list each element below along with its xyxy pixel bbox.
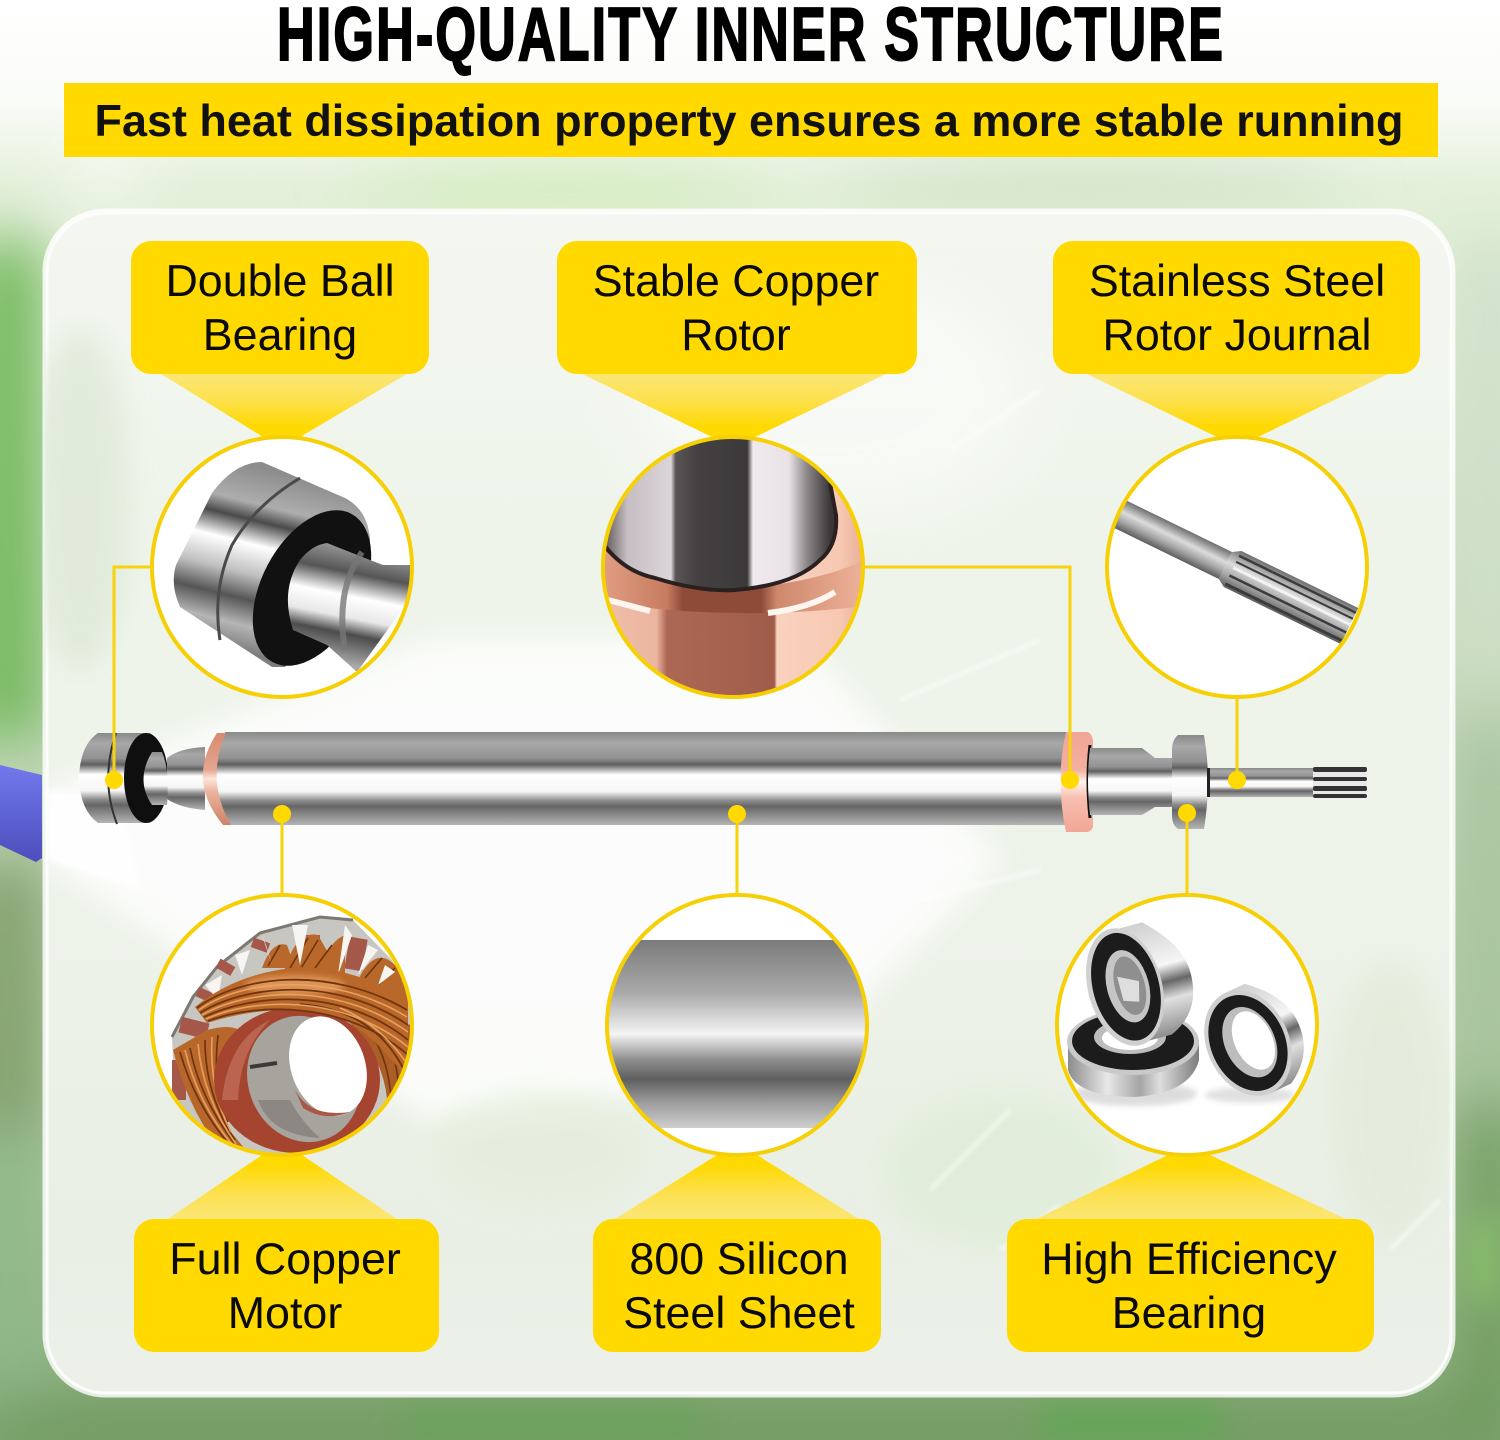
icon: ball bearings group <box>1057 895 1320 1155</box>
callout: High Efficiency Bearing: High Efficiency <box>1041 1234 1337 1284</box>
callout: 800 Silicon Steel Sheet: 800 Silicon <box>629 1234 849 1284</box>
rear copper ring <box>1060 732 1093 832</box>
upright bearing <box>1086 922 1194 1046</box>
icon: double ball bearing closeup <box>152 437 414 697</box>
lower-left coil <box>173 1027 244 1147</box>
marker dots <box>105 771 1246 823</box>
callout: Stable Copper Rotor: Rotor <box>681 310 791 360</box>
callout: Stable Copper Rotor: Stable Copper <box>593 256 879 306</box>
translucent main panel <box>30 212 1452 1394</box>
main coil bundle <box>195 967 408 1080</box>
subtitle banner <box>64 83 1438 157</box>
spray fan <box>48 640 1000 1120</box>
rear journal and second bearing <box>1088 735 1367 829</box>
splines <box>1313 767 1367 798</box>
rotor body <box>216 732 1070 825</box>
standing bearing right <box>1204 984 1304 1096</box>
callout: Stainless Steel Rotor Journal: Rotor Journal <box>1103 310 1371 360</box>
callout: Stainless Steel Rotor Journal: Stainless Steel <box>1089 256 1385 306</box>
rear coil bundles <box>262 934 412 1005</box>
callout: Full Copper Motor: Full Copper <box>169 1234 401 1284</box>
front copper ring <box>203 733 231 825</box>
callout: Full Copper Motor: Motor <box>228 1288 342 1338</box>
rotor shaft assembly <box>79 732 1367 832</box>
callout: Full Copper Motor <box>134 1155 439 1352</box>
hose nozzle at left edge <box>0 765 42 862</box>
lying bearing <box>1068 1040 1199 1097</box>
callout: 800 Silicon Steel Sheet <box>593 1155 881 1352</box>
callout: Stable Copper Rotor <box>557 241 917 437</box>
lower-right coil <box>350 1022 410 1098</box>
callout: Double Ball Bearing <box>131 241 429 437</box>
callout: Stainless Steel Rotor Journal <box>1053 241 1420 437</box>
connector lines <box>114 567 1237 896</box>
callout: High Efficiency Bearing: Bearing <box>1112 1288 1266 1338</box>
icon: copper rotor closeup <box>600 436 866 700</box>
callout: High Efficiency Bearing <box>1007 1155 1374 1352</box>
icon: rotor journal closeup <box>1079 437 1367 697</box>
callout: Double Ball Bearing: Bearing <box>203 310 357 360</box>
callout: Double Ball Bearing: Double Ball <box>165 256 395 306</box>
subtitle banner: Fast heat dissipation property ensures a more stable running <box>94 97 1404 146</box>
callout: 800 Silicon Steel Sheet: Steel Sheet <box>623 1288 855 1338</box>
icon: copper motor stator <box>152 895 414 1160</box>
insulator and bore <box>214 1007 380 1153</box>
front ball bearing <box>79 733 205 824</box>
icon: silicon steel sheet closeup <box>600 895 874 1155</box>
